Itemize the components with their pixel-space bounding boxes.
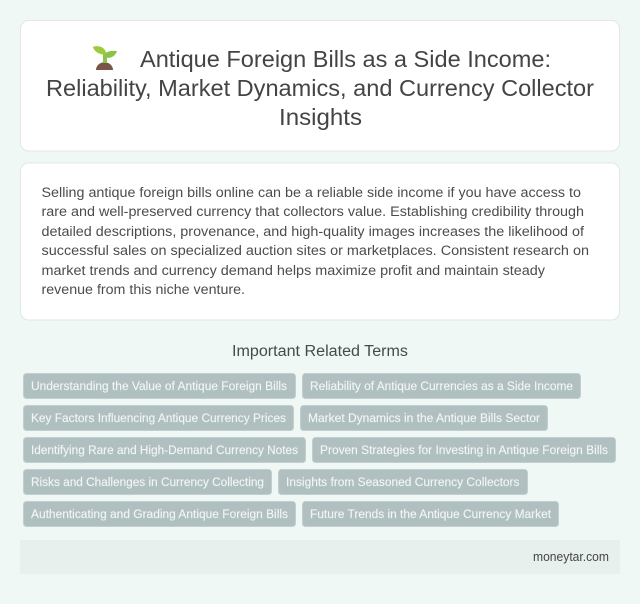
text block: description: revenue from this niche venture. — [42, 282, 245, 298]
tag: proven strategies: Proven Strategies for Investing in Antique Foreign Bills — [320, 443, 608, 457]
panel: description card — [20, 163, 620, 320]
tag: identifying rare notes: Identifying Rare and High-Demand Currency Notes — [31, 443, 298, 457]
tag: reliability — [302, 374, 580, 398]
tag: future trends — [302, 502, 558, 526]
heading: title: Insights — [279, 104, 362, 130]
tag: insights from collectors: Insights from Seasoned Currency Collectors — [286, 475, 520, 489]
heading: title — [46, 46, 594, 130]
text block: description: Selling antique foreign bills online can be a reliable side income if you have access to — [42, 185, 581, 201]
text block: description: market trends and currency demand helps maximize profit and maintain steady — [42, 263, 546, 279]
tag: authenticating and grading: Authenticating and Grading Antique Foreign Bills — [31, 507, 288, 521]
text block: description: detailed descriptions, provenance, and high-quality images increases the likelihood of — [42, 224, 584, 240]
tag: market dynamics — [300, 406, 548, 430]
tag: identifying rare notes — [24, 438, 306, 462]
tag: understanding the value: Understanding the Value of Antique Foreign Bills — [31, 379, 287, 393]
panel: title card — [20, 20, 620, 151]
heading: title: Antique Foreign Bills as a Side Income: — [140, 46, 551, 72]
tag: authenticating and grading — [24, 502, 296, 526]
tag: market dynamics: Market Dynamics in the Antique Bills Sector — [308, 411, 540, 425]
heading: title: Reliability, Market Dynamics, and Currency Collector — [46, 75, 594, 101]
tag: insights from collectors — [278, 470, 528, 494]
text block: description: successful sales on specialized auction sites or marketplaces. Consistent research on — [42, 243, 589, 259]
tag: risks and challenges: Risks and Challenges in Currency Collecting — [31, 475, 264, 489]
tag: risks and challenges — [24, 470, 272, 494]
tag: proven strategies — [312, 438, 616, 462]
tag: reliability: Reliability of Antique Currencies as a Side Income — [310, 379, 573, 393]
text block: description — [42, 185, 589, 298]
footer bar — [20, 540, 620, 574]
text block: description: rare and well-preserved currency that collectors value. Establishing credibility through — [42, 204, 584, 220]
heading: important related terms: Important Related Terms — [232, 343, 408, 360]
tag list: related terms — [24, 374, 616, 526]
footer: site name: moneytar.com — [533, 550, 609, 564]
tag: key factors — [24, 406, 294, 430]
tag: future trends: Future Trends in the Antique Currency Market — [310, 507, 552, 521]
tag: understanding the value — [24, 374, 296, 398]
icon: seedling — [93, 46, 117, 70]
tag: key factors: Key Factors Influencing Antique Currency Prices — [31, 411, 286, 425]
